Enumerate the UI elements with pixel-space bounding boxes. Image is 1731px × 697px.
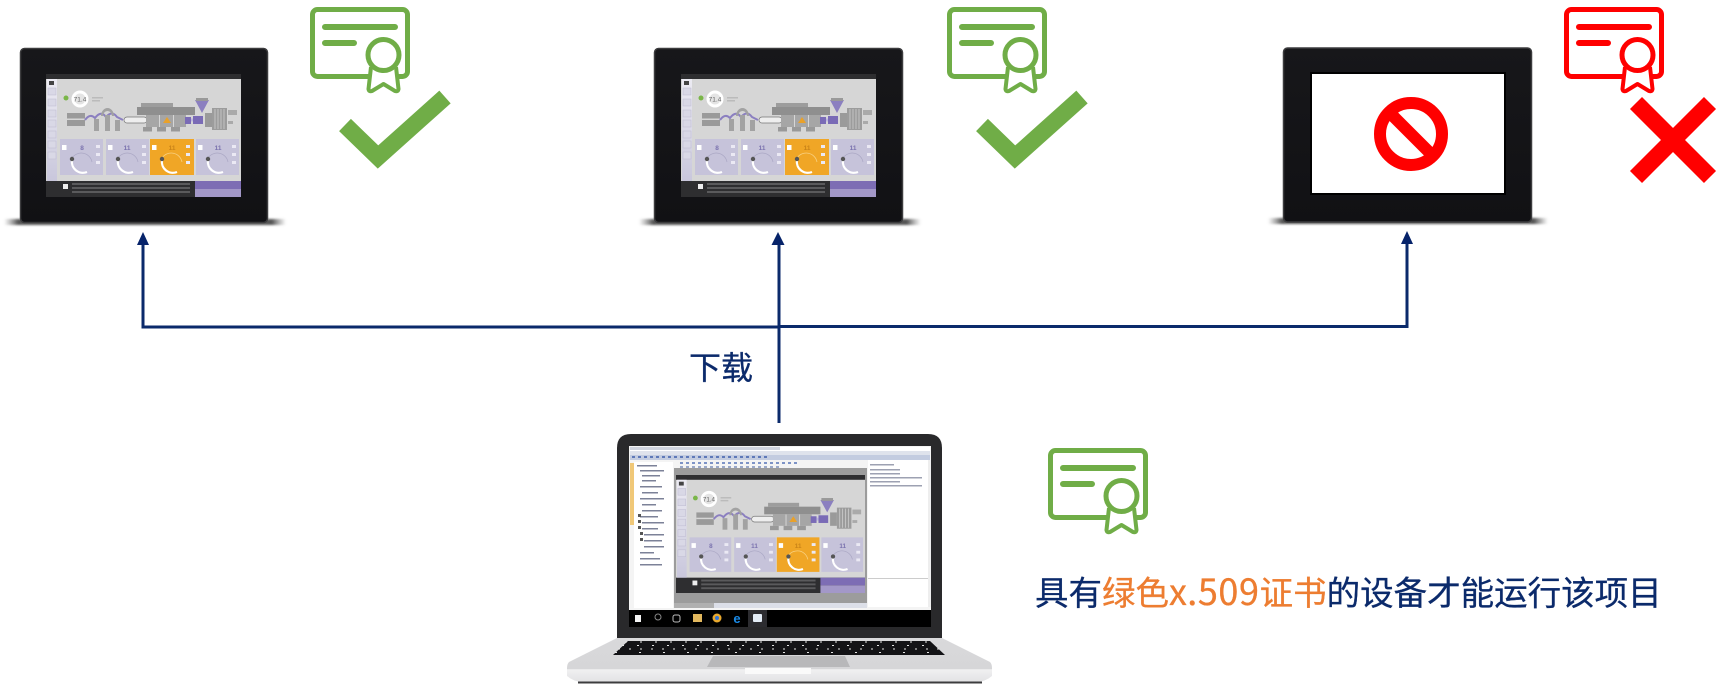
device 1 green certificate	[312, 10, 408, 91]
device 2 green certificate	[950, 10, 1044, 91]
taskbar icons	[635, 610, 767, 627]
icon: prohibited sign	[1380, 103, 1442, 165]
device 3 red cross mark	[1636, 103, 1710, 177]
device 2 green check mark	[982, 97, 1082, 157]
laptop	[567, 434, 992, 684]
device 3 red certificate	[1566, 10, 1662, 91]
panel: device 3 (rejected)	[1268, 10, 1710, 224]
device 2 tablet	[639, 48, 921, 225]
device 3 tablet with blocked screen	[1268, 48, 1548, 224]
taskbar icons: e	[733, 611, 741, 626]
device 1 tablet	[4, 48, 286, 225]
panel: device 2 (allowed)	[639, 10, 1082, 225]
legend: green certificate	[1050, 450, 1146, 532]
download label: 下载	[689, 343, 753, 389]
device 1 green check mark	[345, 97, 445, 157]
caption text: 具有绿色x.509证书的设备才能运行该项目	[1035, 564, 1662, 616]
download arrows	[137, 231, 1413, 423]
panel: device 1 (allowed)	[4, 10, 445, 225]
